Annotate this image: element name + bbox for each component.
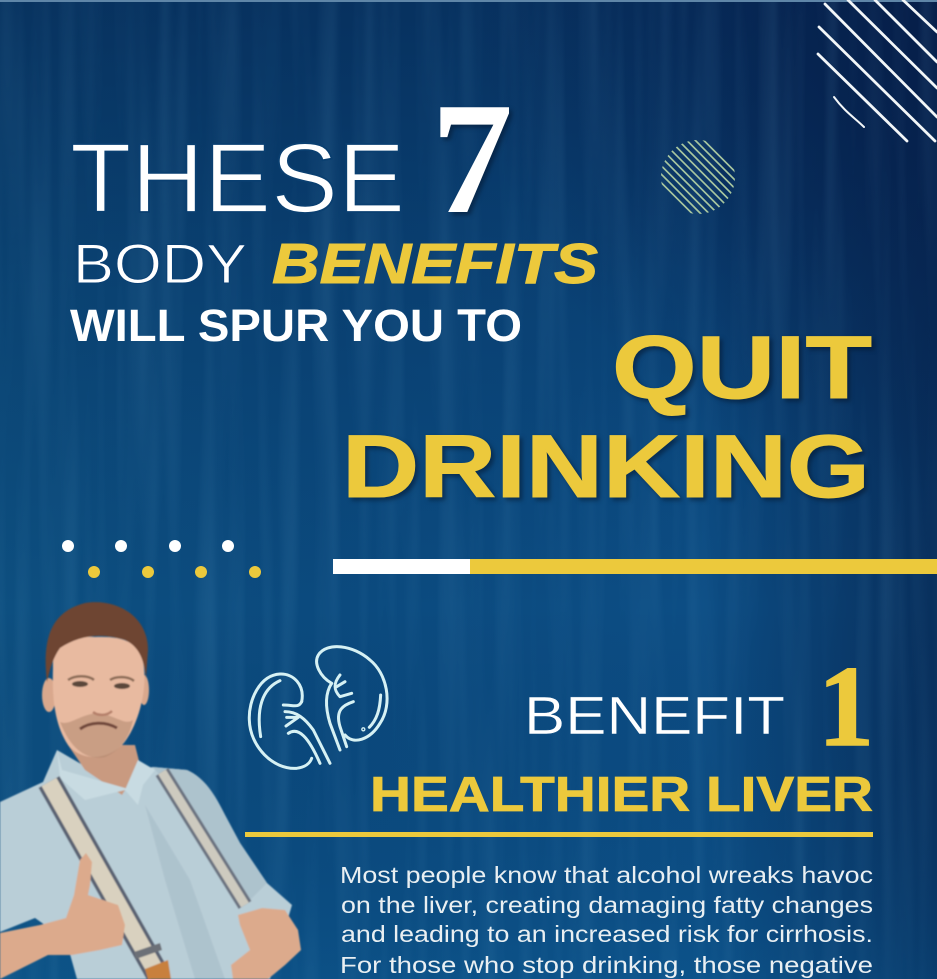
left suspender (49, 782, 158, 975)
title: QUIT: QUIT (612, 317, 872, 417)
right suspender (162, 772, 245, 905)
face (53, 637, 144, 757)
label: BENEFIT: BENEFIT (524, 686, 785, 746)
beard (60, 713, 133, 758)
body text (340, 862, 873, 978)
neck (68, 745, 140, 795)
photo: man with thumbs up (0, 602, 301, 979)
body text: Most people know that alcohol wreaks havoc (340, 862, 873, 888)
subtitle: HEALTHIER LIVER: HEALTHIER LIVER (370, 768, 873, 822)
suspender buckle (134, 943, 162, 959)
title: BENEFITS: BENEFITS (272, 232, 598, 296)
shirt shading (145, 767, 267, 979)
title: DRINKING: DRINKING (342, 416, 870, 516)
title: numeral 7: 7 (431, 69, 513, 247)
decorative striped circle (661, 140, 735, 214)
eyes and brows (68, 676, 134, 715)
decorative dots (62, 540, 261, 578)
collar (57, 750, 155, 805)
numeral 1: 1 (818, 643, 874, 771)
suspender clip (145, 960, 171, 979)
body text: For those who stop drinking, those negative (340, 952, 873, 978)
title: BODY: BODY (73, 232, 247, 295)
shirt (0, 750, 292, 979)
icon: kidneys (249, 647, 387, 768)
heading underline (245, 832, 873, 837)
section divider bar (333, 559, 937, 574)
ears (42, 678, 56, 712)
mouth (80, 723, 117, 729)
title: WILL SPUR YOU TO: WILL SPUR YOU TO (70, 300, 522, 351)
body text: on the liver, creating damaging fatty changes (341, 892, 873, 918)
body text: and leading to an increased risk for cirrhosis. (341, 921, 873, 947)
title: THESE: THESE (70, 123, 405, 233)
benefit heading (370, 643, 874, 822)
hair (46, 602, 148, 682)
title (70, 69, 872, 516)
right hand (231, 908, 301, 979)
thumbs up hand and forearm (0, 853, 125, 979)
decorative diagonal stripes, top right (818, 0, 937, 141)
